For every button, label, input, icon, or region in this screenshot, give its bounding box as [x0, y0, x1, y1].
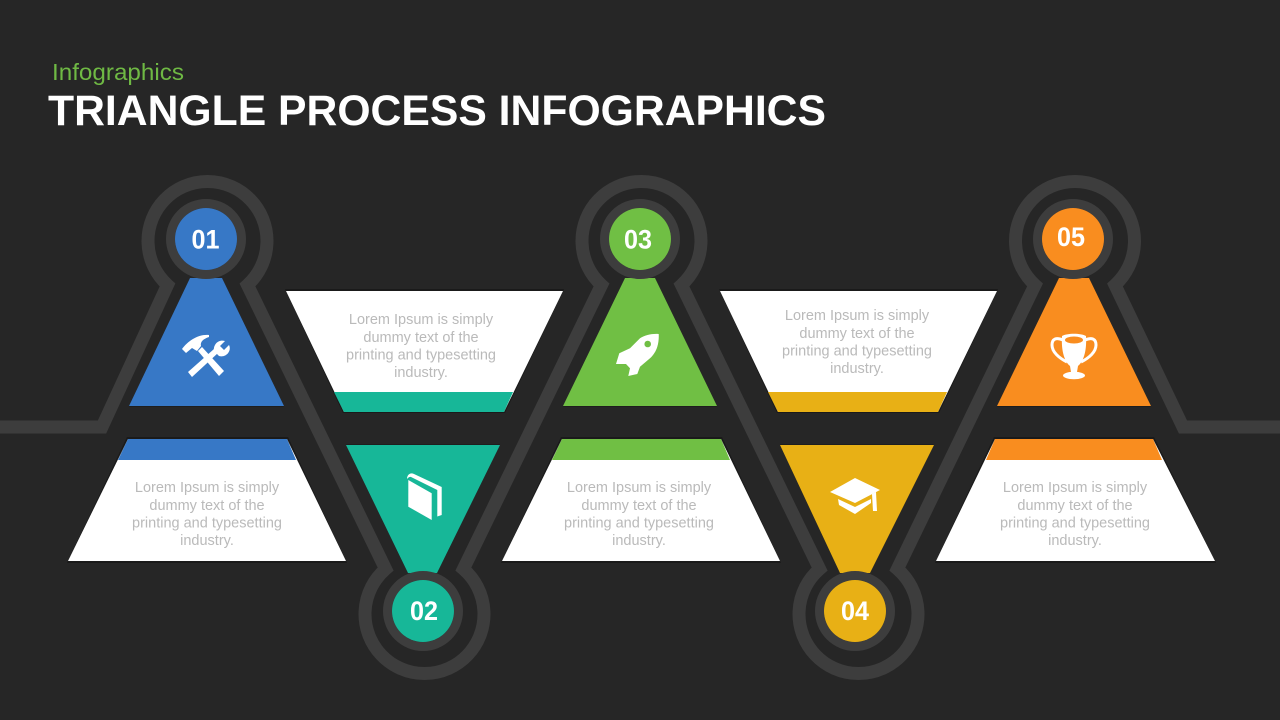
- panel: step 2 text: printing and typesetting: [346, 348, 496, 364]
- number badge 05: [1038, 204, 1108, 274]
- panel: step 4 text: industry.: [830, 361, 884, 377]
- process line: [0, 181, 1280, 674]
- number badge 02: 02: [410, 596, 438, 626]
- step 3 triangle: [563, 278, 717, 407]
- panel: step 5 text: printing and typesetting: [1000, 516, 1150, 532]
- panel: step 1 text: [67, 437, 347, 563]
- panel: step 3 text: printing and typesetting: [564, 516, 714, 532]
- panel: step 3 text: dummy text of the: [581, 498, 697, 514]
- icon: rocket: [616, 334, 659, 376]
- panel: step 2 text: [285, 289, 564, 413]
- panel: step 1 text: industry.: [180, 533, 234, 549]
- step 5 triangle: [997, 278, 1151, 407]
- panel: step 2 text: dummy text of the: [363, 330, 479, 346]
- number badge 04: [820, 576, 890, 646]
- panel: step 4 text: printing and typesetting: [782, 344, 932, 360]
- step 2 triangle: [346, 444, 500, 573]
- number badge 05: 05: [1057, 222, 1085, 252]
- title: TRIANGLE PROCESS INFOGRAPHICS: [48, 87, 826, 135]
- icon: hammer and wrench: [182, 335, 230, 377]
- step 4 triangle: [780, 444, 934, 573]
- panel: step 5 text: Lorem Ipsum is simply: [1003, 480, 1148, 496]
- panel: step 5 text: dummy text of the: [1017, 498, 1133, 514]
- number badge 02: [388, 576, 458, 646]
- icon: trophy: [1052, 334, 1096, 379]
- panel: step 1 text: dummy text of the: [149, 498, 265, 514]
- subtitle: Infographics: [52, 59, 184, 85]
- panel: step 3 text: Lorem Ipsum is simply: [567, 480, 712, 496]
- panel: step 4 text: Lorem Ipsum is simply: [785, 308, 930, 324]
- panel: step 5 text: industry.: [1048, 533, 1102, 549]
- panel: step 2 text: Lorem Ipsum is simply: [349, 312, 494, 328]
- number badge 04: 04: [841, 596, 869, 626]
- panel: step 3 text: industry.: [612, 533, 666, 549]
- number badge 01: [170, 204, 242, 274]
- panel: step 2 text: industry.: [394, 365, 448, 381]
- panel: step 4 text: dummy text of the: [799, 326, 915, 342]
- number badge 01: 01: [192, 224, 220, 254]
- panel: step 5 text: [935, 437, 1216, 563]
- panel: step 4 text: [719, 289, 998, 413]
- panel: step 1 text: printing and typesetting: [132, 516, 282, 532]
- number badge 03: 03: [624, 224, 652, 254]
- number badge 03: [604, 204, 676, 274]
- icon: book: [407, 473, 442, 520]
- panel: step 1 text: Lorem Ipsum is simply: [135, 480, 280, 496]
- step 1 triangle: [129, 278, 284, 407]
- icon: graduation cap: [830, 478, 880, 514]
- panel: step 3 text: [501, 437, 781, 563]
